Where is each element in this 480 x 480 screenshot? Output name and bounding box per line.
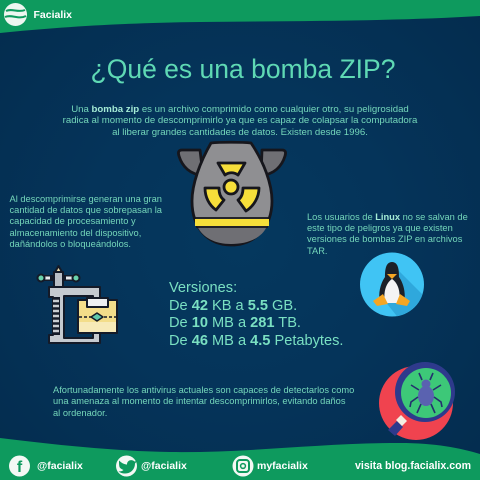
right text block: este tipo de peligros ya que existen: [307, 223, 453, 233]
title: ¿Qué es una bomba ZIP?: [91, 54, 395, 84]
right text block: TAR.: [307, 246, 328, 256]
brand name: Facialix: [34, 9, 72, 21]
icon: bomb: [178, 142, 286, 245]
icon: facebook: [9, 456, 30, 476]
intro text: [63, 104, 418, 138]
icon: magnifying glass with bug: [379, 362, 455, 440]
closing text: una amenaza al momento de intentar descomprimirlos, evitando daños: [53, 396, 346, 406]
left text block: capacidad de procesamiento y: [10, 216, 136, 226]
footer: twitter handle: @facialix: [141, 460, 187, 472]
footer: instagram handle: myfacialix: [257, 460, 308, 472]
versions list: De 10 MB a 281 TB.: [169, 315, 301, 331]
left text block: cantidad de datos que sobrepasan la: [10, 205, 162, 215]
versions list: De 42 KB a 5.5 GB.: [169, 298, 297, 314]
icon: instagram: [232, 456, 254, 476]
left text block: [10, 194, 162, 249]
logo: Facialix: [4, 3, 27, 26]
versions list: [169, 280, 343, 349]
versions list: Versiones:: [169, 280, 237, 296]
right text block: [307, 212, 468, 256]
closing text: Afortunadamente los antivirus actuales son capaces de detectarlos como: [53, 385, 354, 395]
icon: clamp compressing file: [38, 266, 117, 343]
versions list: De 46 MB a 4.5 Petabytes.: [169, 333, 343, 349]
left text block: almacenamiento del dispositivo,: [10, 228, 141, 238]
closing text: al ordenador.: [53, 408, 107, 418]
footer: facebook handle: @facialix: [37, 460, 83, 472]
footer: website: visita blog.facialix.com: [355, 460, 471, 472]
footer band: [0, 438, 480, 480]
left text block: dañándolos o bloqueándolos.: [10, 239, 131, 249]
intro text: Una bomba zip es un archivo comprimido como cualquier otro, su peligrosidad: [71, 104, 409, 114]
icon: facebook: f: [17, 459, 23, 476]
left text block: Al descomprimirse generan una gran: [10, 194, 162, 204]
header band: [0, 0, 480, 33]
icon: Linux penguin: [360, 252, 424, 316]
right text block: Los usuarios de Linux no se salvan de: [307, 212, 468, 222]
right text block: versiones de bombas ZIP en archivos: [307, 234, 462, 244]
intro text: radica al momento de descomprimirlo ya que es capaz de colapsar la computadora: [63, 115, 417, 126]
icon: twitter: [116, 456, 137, 476]
closing text: [53, 385, 354, 418]
intro text: al liberar grandes cantidades de datos. Existen desde 1996.: [112, 126, 368, 138]
